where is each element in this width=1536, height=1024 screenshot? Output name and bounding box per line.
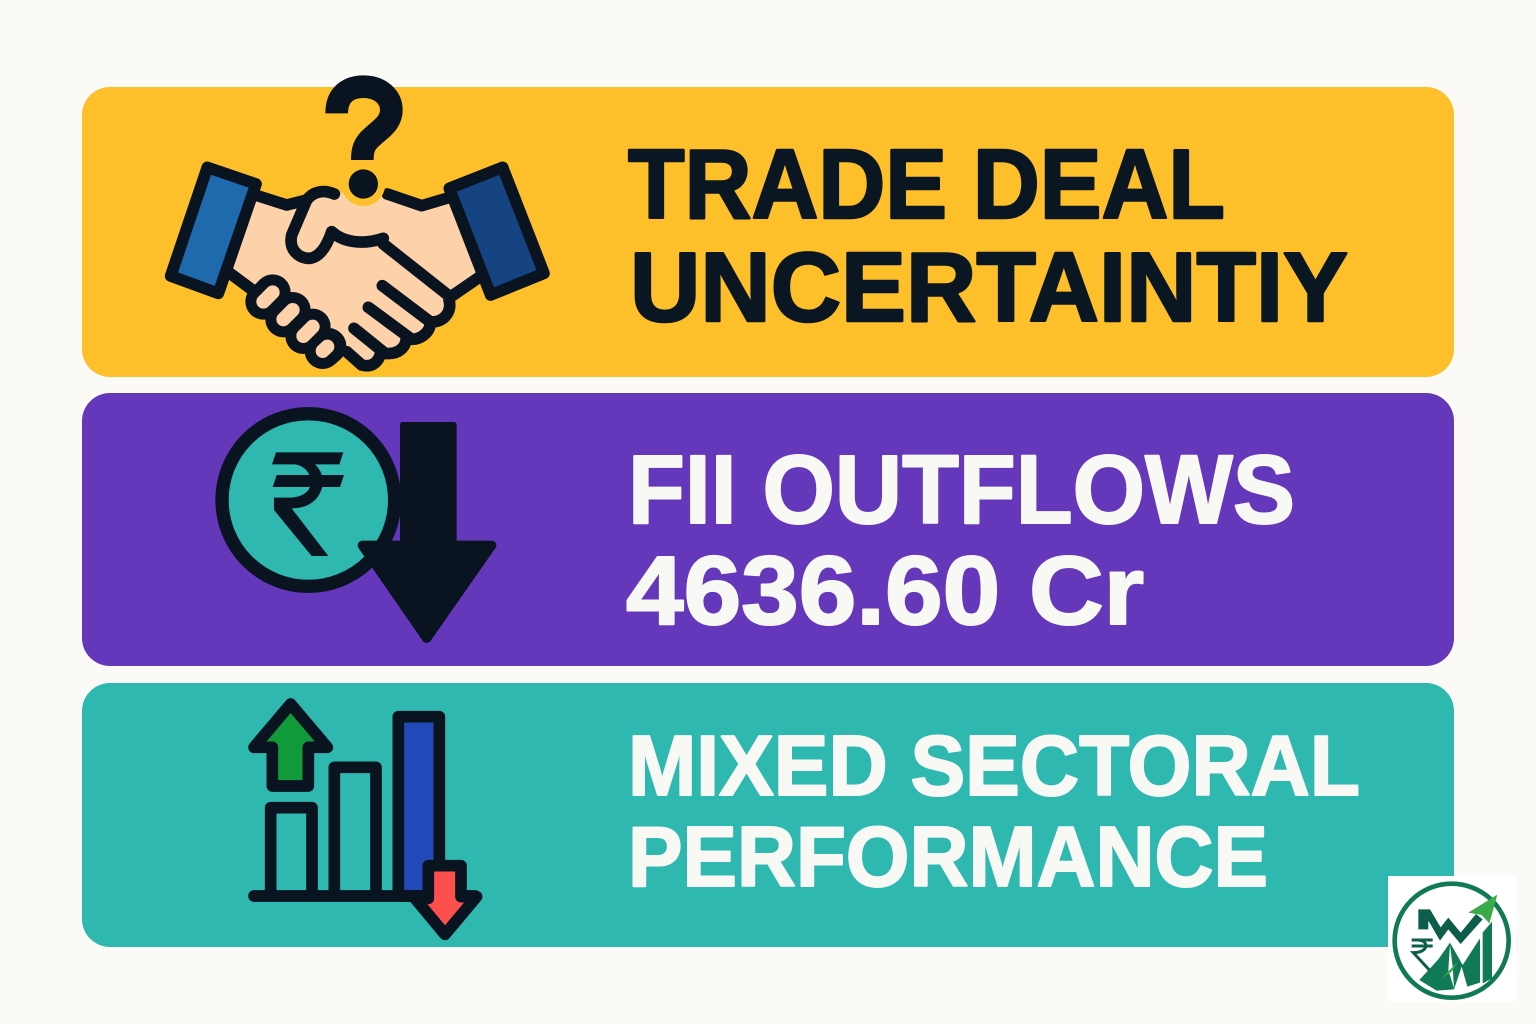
mountain [1419,938,1480,991]
arrow head [362,545,492,638]
green arrow tip [1468,895,1497,923]
logo mark [1395,884,1509,998]
question mark dot [349,169,378,199]
right cuff [449,167,544,295]
knuckles of left hand [263,292,328,351]
logo ring [1395,884,1509,998]
hands fill [232,192,478,368]
panel: trade deal uncertainty [82,87,1454,377]
panel background: teal [82,683,1454,947]
icon: handshake with question mark [171,87,544,368]
hand outlines [230,192,480,366]
panel: fii outflows [82,393,1454,666]
left cuff [171,167,256,293]
panel background: yellow [82,87,1454,377]
heading: fii outflows figure [626,435,1295,645]
baseline [254,878,475,913]
middle bar [334,767,376,896]
compass green point [1442,961,1458,978]
arrow shaft [400,422,457,545]
green up arrow [254,704,327,786]
logo badge [1388,876,1516,1002]
rupee glyph [1412,940,1433,970]
panel: mixed sectoral performance [82,683,1454,947]
heading: trade deal uncertainty: TRADE DEAL [628,129,1225,239]
rupee sign [272,452,344,556]
heading: trade deal uncertainty [628,129,1348,342]
yellow notch under question dot [341,162,385,206]
chart bar [1483,922,1492,983]
heading: fii outflows figure: 4636.60 Cr [626,536,1144,645]
icon: bar chart with arrows [254,704,477,934]
panel background: purple [82,393,1454,666]
rupee coin [222,414,395,586]
heading: trade deal uncertainty: UNCERTAINTIY [630,232,1348,342]
tall blue bar [398,717,439,896]
compass needle [1448,945,1454,988]
M and W trend line [1418,909,1483,944]
heading: mixed sectoral performance [628,719,1360,905]
logo white tile [1388,876,1516,1002]
red down arrow [415,866,477,934]
heading: mixed sectoral performance: PERFORMANCE [628,810,1268,905]
question mark hook [337,87,391,160]
heading: mixed sectoral performance: MIXED SECTORAL [628,719,1360,814]
short bar [271,808,312,896]
icon: rupee coin with down arrow [222,414,492,638]
heading: fii outflows figure: FII OUTFLOWS [628,435,1295,544]
